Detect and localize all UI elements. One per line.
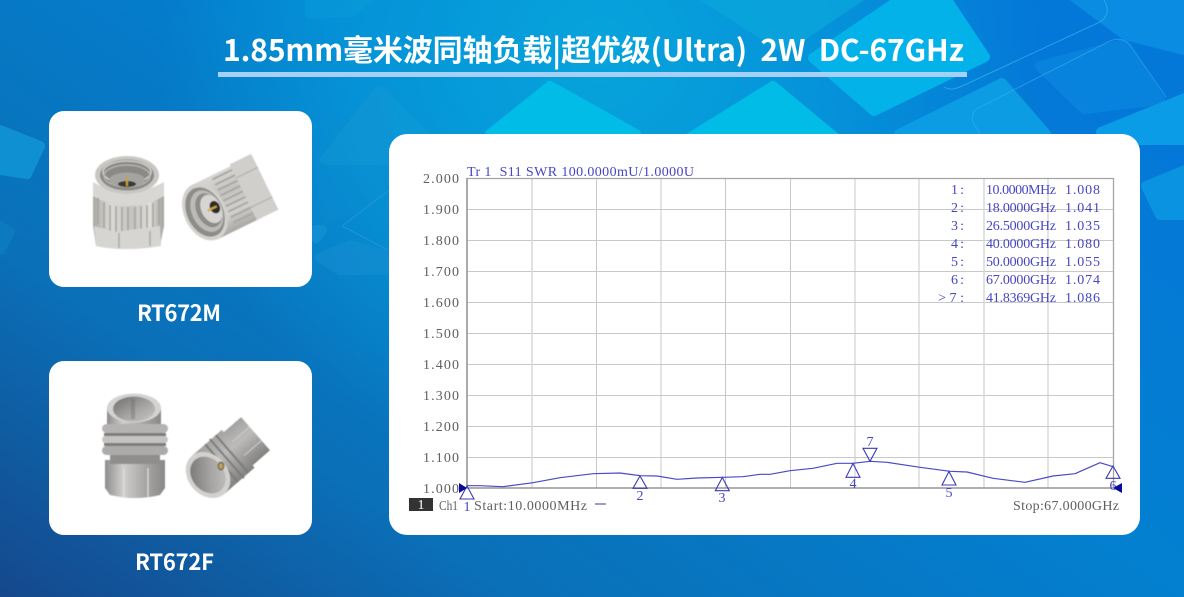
marker table: 1.035 bbox=[1065, 219, 1100, 234]
icon: RT672F connector, angled view bbox=[176, 414, 273, 508]
title: 1.85mm毫米波同轴负载|超优级(Ultra) 2W DC-67GHz bbox=[223, 26, 964, 70]
marker numbers: 6 bbox=[1110, 479, 1116, 494]
y-axis labels: 1.800 bbox=[423, 234, 459, 249]
panel: RT672M product bbox=[49, 111, 312, 287]
channel footer: Ch1 bbox=[439, 499, 458, 514]
marker numbers: 1 bbox=[464, 500, 470, 515]
marker table: 1.008 bbox=[1065, 183, 1100, 198]
marker table: 18.0000GHz bbox=[986, 201, 1056, 216]
marker table: 6: bbox=[951, 273, 964, 288]
icon: RT672M connector, front view bbox=[93, 156, 164, 249]
marker table: 5: bbox=[951, 255, 964, 270]
y-axis labels: 1.100 bbox=[423, 451, 459, 466]
marker table: 10.0000MHz bbox=[986, 183, 1056, 198]
marker numbers: 2 bbox=[636, 489, 644, 504]
channel footer: Stop:67.0000GHz bbox=[1013, 499, 1119, 514]
channel footer bbox=[409, 498, 1119, 514]
y-axis labels: 1.200 bbox=[423, 420, 459, 435]
y-axis labels: 2.000 bbox=[423, 172, 459, 187]
y-axis labels: 1.300 bbox=[423, 389, 459, 404]
channel footer: Start:10.0000MHz bbox=[474, 499, 587, 514]
marker numbers: 5 bbox=[946, 486, 952, 501]
panel: SWR chart bbox=[389, 134, 1140, 535]
y-axis labels: 1.900 bbox=[423, 203, 459, 218]
marker table: 1.086 bbox=[1065, 291, 1100, 306]
marker numbers bbox=[464, 435, 1116, 515]
markers bbox=[460, 448, 1120, 499]
y-axis labels bbox=[423, 172, 459, 497]
y-axis labels: 1.400 bbox=[423, 358, 459, 373]
marker table: 1.041 bbox=[1065, 201, 1100, 216]
marker table: 67.0000GHz bbox=[986, 273, 1056, 288]
chart header: Tr 1 S11 SWR 100.0000mU/1.0000U bbox=[467, 165, 694, 180]
marker table: 1.080 bbox=[1065, 237, 1100, 252]
marker table: 4: bbox=[951, 237, 964, 252]
y-axis labels: 1.500 bbox=[423, 327, 459, 342]
reference arrow left bbox=[459, 483, 467, 493]
marker table bbox=[938, 183, 1100, 306]
y-axis labels: 1.600 bbox=[423, 296, 459, 311]
panel: RT672F product bbox=[49, 361, 312, 535]
y-axis labels: 1.000 bbox=[423, 482, 459, 497]
icon: RT672M connector, angled view bbox=[172, 154, 278, 248]
marker numbers: 3 bbox=[718, 491, 726, 506]
y-axis labels: 1.700 bbox=[423, 265, 459, 280]
marker table: 40.0000GHz bbox=[986, 237, 1056, 252]
SWR trace bbox=[467, 461, 1113, 487]
marker numbers: 7 bbox=[866, 435, 874, 450]
marker table: 1.055 bbox=[1065, 255, 1100, 270]
marker table: >7: bbox=[938, 291, 964, 306]
channel footer: 1 bbox=[418, 498, 424, 513]
marker table: 26.5000GHz bbox=[986, 219, 1056, 234]
reference arrow right bbox=[1113, 483, 1122, 493]
marker table: 2: bbox=[951, 201, 964, 216]
marker table: 50.0000GHz bbox=[986, 255, 1056, 270]
marker numbers: 4 bbox=[850, 477, 856, 492]
marker table: 3: bbox=[951, 219, 964, 234]
label: RT672F: RT672F bbox=[135, 545, 214, 577]
marker table: 1: bbox=[951, 183, 964, 198]
label: RT672M: RT672M bbox=[137, 296, 221, 328]
marker table: 41.8369GHz bbox=[986, 291, 1056, 306]
marker table: 1.074 bbox=[1065, 273, 1100, 288]
icon: RT672F connector, front view bbox=[102, 394, 168, 498]
